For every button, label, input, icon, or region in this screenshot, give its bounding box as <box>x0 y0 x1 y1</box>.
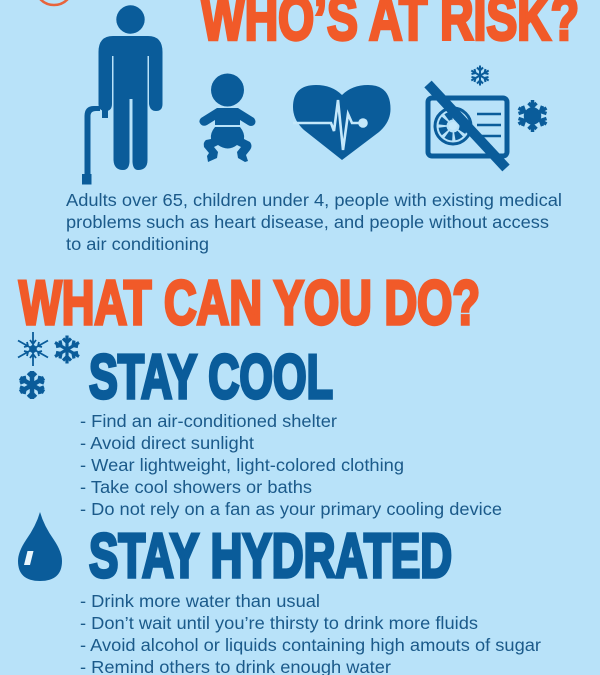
icon: cropped orange circle <box>35 0 73 5</box>
text: who is at risk description: to air conditioning <box>66 234 209 254</box>
list: stay cool tips: - Do not rely on a fan as your primary cooling device <box>80 499 502 519</box>
list: stay cool tips <box>80 411 502 519</box>
text: who is at risk description: Adults over 65, children under 4, people with existing medical <box>66 190 562 210</box>
list: stay hydrated tips: - Don’t wait until you’re thirsty to drink more fluids <box>80 613 478 633</box>
icon: water drop <box>18 512 62 581</box>
text: who is at risk description <box>66 190 562 254</box>
list: stay cool tips: - Take cool showers or baths <box>80 477 312 497</box>
list: stay hydrated tips: - Avoid alcohol or liquids containing high amouts of sugar <box>80 635 541 655</box>
icon: baby <box>199 74 256 162</box>
icon: heart with pulse <box>293 85 390 160</box>
icon: older adult with cane <box>82 5 162 184</box>
heading: stay hydrated: STAY HYDRATED <box>89 522 452 591</box>
list: stay cool tips: - Avoid direct sunlight <box>80 433 254 453</box>
icon: snowflake cluster <box>18 332 79 399</box>
list: stay cool tips: - Find an air-conditioned shelter <box>80 411 337 431</box>
list: stay hydrated tips <box>80 591 541 675</box>
heading: stay cool: STAY COOL <box>89 343 333 412</box>
icon: large snowflake <box>518 100 546 132</box>
list: stay hydrated tips: - Drink more water than usual <box>80 591 320 611</box>
icon: crossed-out air conditioner <box>428 84 507 168</box>
list: stay cool tips: - Wear lightweight, light-colored clothing <box>80 455 404 475</box>
icon: small snowflake <box>471 66 489 86</box>
text: who is at risk description: problems such as heart disease, and people without access <box>66 212 549 232</box>
